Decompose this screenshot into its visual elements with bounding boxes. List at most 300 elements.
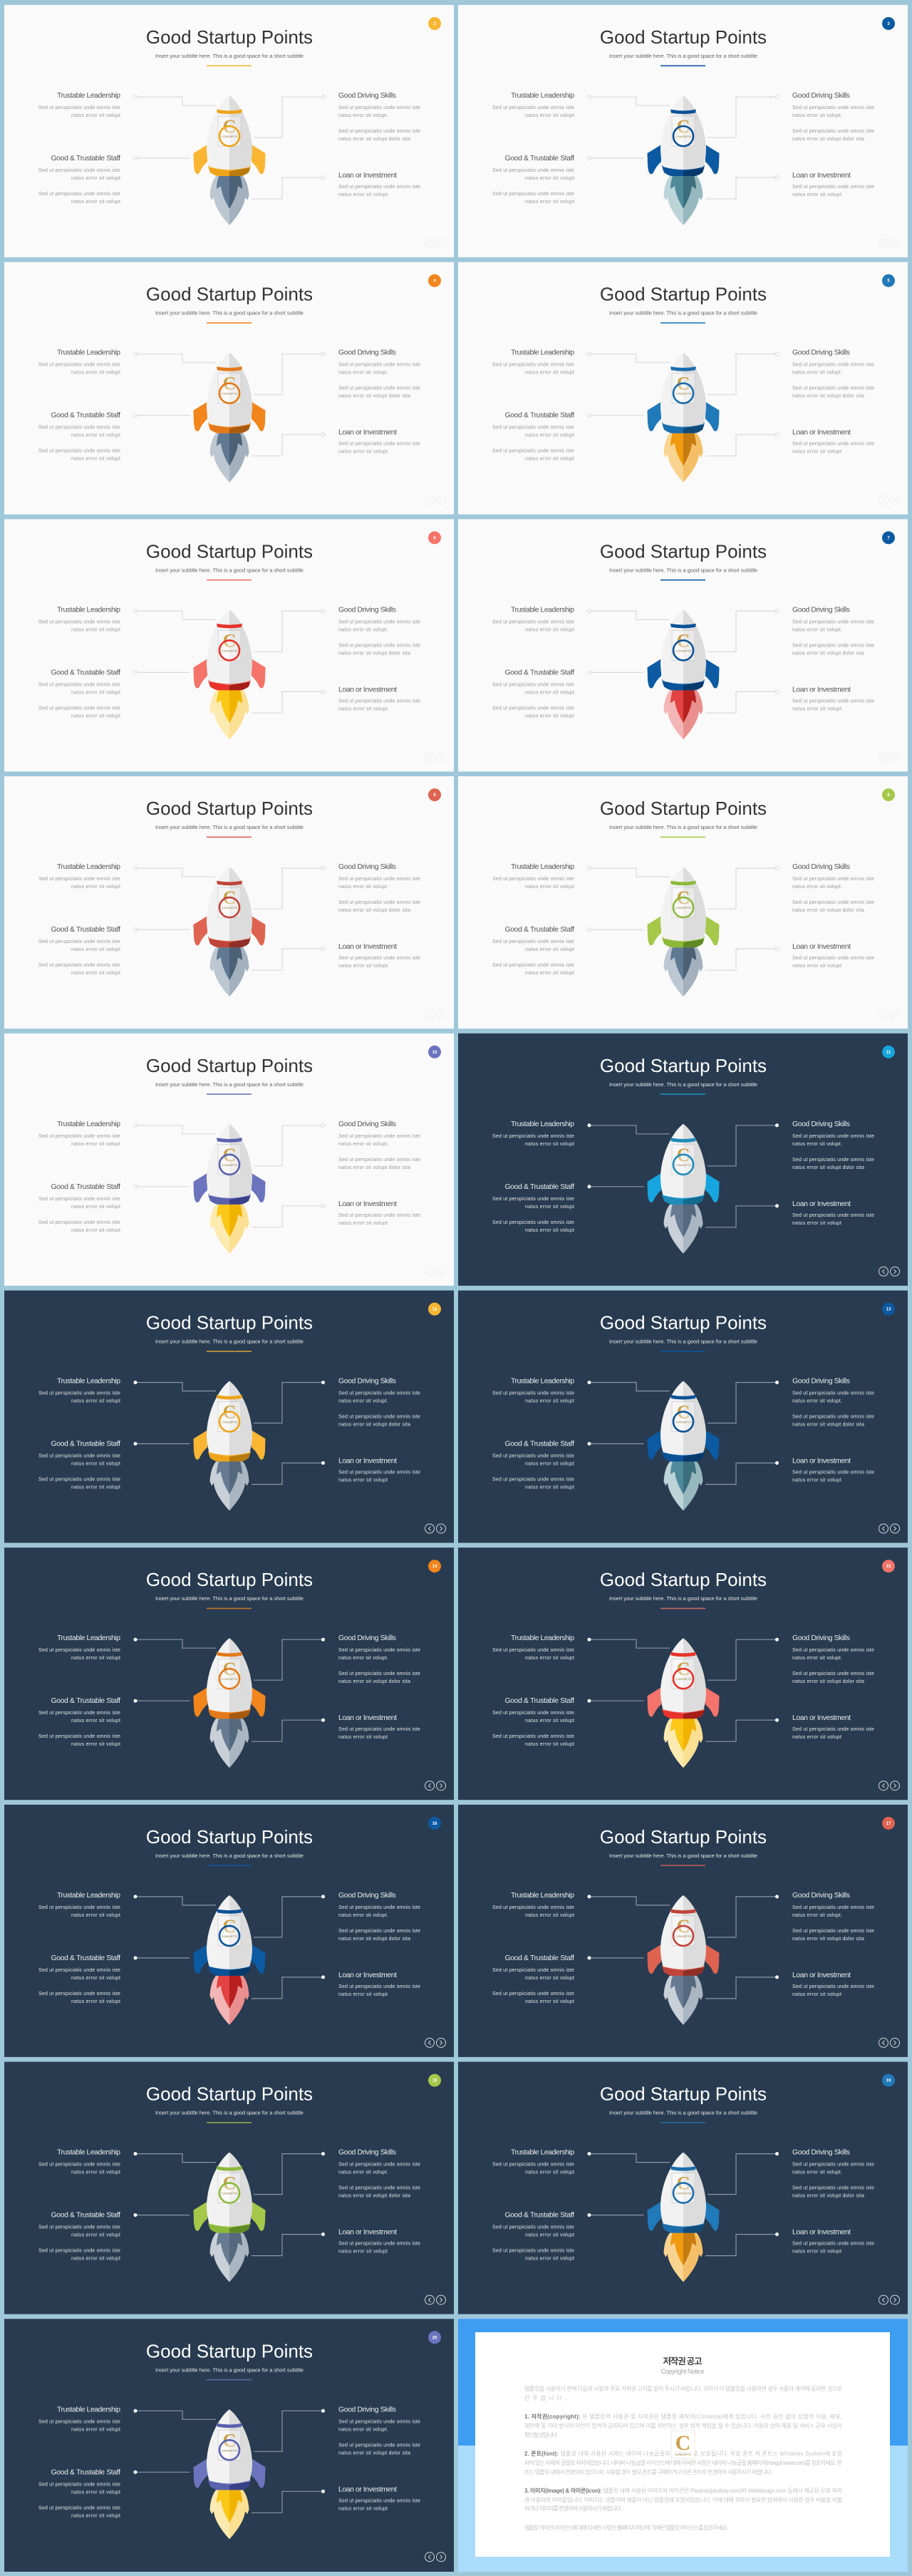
text block: left column: Trustable Leadership bbox=[57, 1120, 120, 1128]
subtitle: Insert your subtitle here. This is a good space for a short subtitle bbox=[155, 1595, 304, 1602]
text block: right column: natus error sit volupt. bbox=[792, 884, 842, 890]
title: Good Startup Points bbox=[146, 540, 313, 562]
title: Good Startup Points bbox=[600, 26, 767, 48]
text block: left column: Sed ut perspiciatis unde omnis iste bbox=[38, 681, 120, 687]
panel: slide 9 bbox=[458, 776, 908, 1029]
text block: right column bbox=[338, 2406, 420, 2511]
text block: left column: Good & Trustable Staff bbox=[51, 1697, 120, 1705]
nav arrows bbox=[425, 753, 446, 762]
text block: right column bbox=[792, 92, 874, 197]
text block: left column: Trustable Leadership bbox=[511, 92, 574, 100]
notice body text: 템플릿을 사용하기 전에 다음의 사항과 주요 저작권 고지를 읽어 주시기 바랍니다. 귀하가 이 템플릿을 사용하면 경우 사용자 계약에 동의한 것으로 bbox=[524, 2385, 842, 2392]
text block: left column: Good & Trustable Staff bbox=[51, 2212, 120, 2220]
accent underline bbox=[660, 1093, 705, 1095]
text block: left column: Sed ut perspiciatis unde omnis iste bbox=[492, 681, 574, 687]
icon: rocket bbox=[647, 2153, 720, 2282]
page badge bbox=[428, 17, 441, 30]
nav arrows bbox=[425, 238, 446, 248]
page badge: 8 bbox=[433, 793, 436, 798]
text block: right column: Sed ut perspiciatis unde omnis iste bbox=[792, 1671, 874, 1676]
text block: right column: Loan or Investment bbox=[338, 1200, 397, 1208]
text block: right column: Sed ut perspiciatis unde omnis iste bbox=[338, 441, 420, 447]
text block: right column: Sed ut perspiciatis unde omnis iste bbox=[338, 1414, 420, 1420]
panel: slide 17 bbox=[458, 1805, 908, 2057]
subtitle: Insert your subtitle here. This is a good space for a short subtitle bbox=[609, 1595, 757, 1602]
text block: right column: Good Driving Skills bbox=[792, 92, 850, 100]
text block: right column: Sed ut perspiciatis unde omnis iste bbox=[338, 2498, 420, 2503]
text block: right column: Sed ut perspiciatis unde omnis iste bbox=[338, 105, 420, 110]
text block: right column: natus error sit volupt dolor sita bbox=[338, 2193, 410, 2199]
text block: left column: natus error sit volupt bbox=[525, 1398, 574, 1404]
text block: left column: Good & Trustable Staff bbox=[504, 2212, 574, 2220]
text block: right column: Sed ut perspiciatis unde omnis iste bbox=[338, 1671, 420, 1676]
text block: left column: Sed ut perspiciatis unde omnis iste bbox=[38, 2248, 120, 2254]
page badge bbox=[882, 1303, 895, 1316]
icon: rocket bbox=[194, 96, 265, 225]
text block: left column: natus error sit volupt bbox=[525, 713, 574, 718]
text block: left column: Sed ut perspiciatis unde omnis iste bbox=[492, 1710, 574, 1716]
text block: left column bbox=[38, 349, 120, 462]
notice body text: 3. 이미지(image) & 아이콘(icon): 템플릿 내에 사용된 이미지와 아이콘은 Pixabay(pixabay.com)와 Webdesign.com 등에서 제공된 무료 저작 bbox=[524, 2487, 843, 2494]
page badge bbox=[428, 274, 441, 287]
text block: left column bbox=[38, 1377, 120, 1490]
icon: rocket: CONCEPTS bbox=[222, 1934, 237, 1938]
connectors bbox=[134, 1381, 325, 1484]
subtitle: Insert your subtitle here. This is a good space for a short subtitle bbox=[155, 1339, 304, 1344]
text block: left column: Good & Trustable Staff bbox=[504, 669, 574, 676]
text block: right column: natus error sit volupt bbox=[792, 963, 841, 969]
title: Good Startup Points bbox=[146, 1312, 313, 1333]
icon: rocket: CONCEPTS bbox=[675, 1163, 691, 1167]
text block: right column: natus error sit volupt bbox=[792, 1220, 841, 1226]
text block: right column bbox=[338, 2149, 420, 2255]
page badge bbox=[882, 1560, 895, 1572]
text block: left column: Sed ut perspiciatis unde omnis iste bbox=[492, 425, 574, 431]
accent underline bbox=[207, 1093, 252, 1095]
connectors bbox=[587, 867, 779, 970]
text block: left column: natus error sit volupt bbox=[525, 884, 574, 890]
text block: right column: Sed ut perspiciatis unde omnis iste bbox=[338, 184, 420, 190]
text block: left column: Sed ut perspiciatis unde omnis iste bbox=[492, 1477, 574, 1483]
text block: right column: Sed ut perspiciatis unde omnis iste bbox=[792, 1647, 874, 1653]
page badge bbox=[428, 2331, 441, 2344]
text block: left column bbox=[492, 92, 574, 205]
subtitle: Insert your subtitle here. This is a good space for a short subtitle bbox=[155, 53, 304, 59]
text block: right column: natus error sit volupt. bbox=[338, 1912, 388, 1918]
panel: slide 13 bbox=[458, 1290, 908, 1542]
notice heading: 저작권 공고 bbox=[663, 2356, 703, 2366]
panel: slide 7 bbox=[458, 519, 908, 771]
text block: right column: Sed ut perspiciatis unde omnis iste bbox=[792, 105, 874, 110]
logo watermark bbox=[671, 2431, 695, 2458]
text block: left column: Trustable Leadership bbox=[57, 2149, 120, 2157]
text block: right column: Sed ut perspiciatis unde omnis iste bbox=[792, 2185, 874, 2191]
page badge bbox=[882, 531, 895, 544]
subtitle: Insert your subtitle here. This is a good space for a short subtitle bbox=[155, 824, 304, 830]
text block: right column: natus error sit volupt. bbox=[792, 1141, 842, 1147]
text block: right column: natus error sit volupt bbox=[338, 963, 388, 969]
connectors bbox=[587, 1895, 779, 1999]
text block: left column: natus error sit volupt bbox=[71, 199, 120, 205]
page badge: 10 bbox=[432, 1051, 437, 1055]
text block: left column: Sed ut perspiciatis unde omnis iste bbox=[38, 1220, 120, 1225]
text block: left column: natus error sit volupt bbox=[525, 2170, 574, 2175]
text block: right column: Loan or Investment bbox=[338, 686, 397, 694]
page badge bbox=[882, 788, 895, 801]
text block: right column: natus error sit volupt dolor sita bbox=[792, 907, 864, 913]
text block: left column: Good & Trustable Staff bbox=[504, 926, 574, 934]
text block: left column: Sed ut perspiciatis unde omnis iste bbox=[38, 168, 120, 173]
text block: left column: Sed ut perspiciatis unde omnis iste bbox=[38, 1905, 120, 1910]
text block: left column: Sed ut perspiciatis unde omnis iste bbox=[492, 1647, 574, 1653]
text block: left column: Trustable Leadership bbox=[511, 1634, 574, 1642]
text block: right column: Sed ut perspiciatis unde omnis iste bbox=[338, 619, 420, 624]
text block: left column: Trustable Leadership bbox=[511, 606, 574, 614]
text block: left column: natus error sit volupt bbox=[71, 1975, 120, 1981]
text block: left column bbox=[492, 2149, 574, 2262]
icon: rocket: CONCEPTS bbox=[675, 1420, 691, 1424]
text block: left column: Trustable Leadership bbox=[57, 2406, 120, 2413]
nav arrows bbox=[425, 2552, 446, 2562]
text block: left column: Sed ut perspiciatis unde omnis iste bbox=[492, 1390, 574, 1396]
text block: left column: natus error sit volupt bbox=[71, 1461, 120, 1467]
page badge: 4 bbox=[433, 279, 436, 284]
accent underline bbox=[660, 1608, 705, 1609]
icon: rocket: C bbox=[677, 1916, 690, 1937]
text block: left column: Sed ut perspiciatis unde omnis iste bbox=[492, 2162, 574, 2168]
text block: right column: natus error sit volupt. bbox=[792, 1912, 842, 1918]
icon: rocket bbox=[647, 1124, 720, 1254]
title: Good Startup Points bbox=[600, 1055, 767, 1076]
title: Good Startup Points bbox=[600, 2083, 767, 2105]
text block: left column: natus error sit volupt bbox=[525, 1655, 574, 1661]
text block: right column bbox=[338, 1892, 420, 1997]
title: Good Startup Points bbox=[146, 1055, 313, 1076]
icon: rocket: C bbox=[677, 887, 690, 908]
text block: left column: Trustable Leadership bbox=[511, 349, 574, 357]
nav arrows bbox=[425, 1524, 446, 1533]
icon: rocket: CONCEPTS bbox=[675, 135, 691, 138]
accent underline bbox=[207, 579, 252, 580]
panel: slide 19 bbox=[458, 2062, 908, 2314]
text block: right column: natus error sit volupt bbox=[792, 1477, 841, 1483]
title: Good Startup Points bbox=[600, 540, 767, 562]
text block: left column: Sed ut perspiciatis unde omnis iste bbox=[38, 105, 120, 110]
text block: right column: natus error sit volupt dolor sita bbox=[338, 393, 410, 399]
text block: left column: Good & Trustable Staff bbox=[51, 669, 120, 676]
text block: right column: natus error sit volupt bbox=[792, 449, 841, 455]
text block: left column: natus error sit volupt bbox=[525, 456, 574, 462]
subtitle: Insert your subtitle here. This is a good space for a short subtitle bbox=[155, 2366, 304, 2373]
text block: left column bbox=[492, 349, 574, 462]
page badge: 12 bbox=[432, 1307, 437, 1312]
text block: left column bbox=[492, 1634, 574, 1747]
text block: right column: Good Driving Skills bbox=[792, 1120, 850, 1128]
icon: rocket bbox=[194, 1124, 265, 1254]
text block: left column: natus error sit volupt bbox=[71, 2232, 120, 2238]
accent underline bbox=[660, 837, 705, 838]
panel: slide 4 bbox=[4, 262, 454, 515]
page badge bbox=[428, 788, 441, 801]
text block: right column: natus error sit volupt bbox=[792, 706, 841, 711]
text block: right column: Sed ut perspiciatis unde omnis iste bbox=[792, 2162, 874, 2168]
text block: right column: Sed ut perspiciatis unde omnis iste bbox=[338, 900, 420, 905]
text block: right column: Good Driving Skills bbox=[792, 1377, 850, 1386]
nav arrows bbox=[879, 238, 899, 248]
text block: right column: Sed ut perspiciatis unde omnis iste bbox=[792, 1414, 874, 1420]
text block: left column: Sed ut perspiciatis unde omnis iste bbox=[492, 705, 574, 711]
text block: left column: Sed ut perspiciatis unde omnis iste bbox=[38, 1991, 120, 1997]
accent underline bbox=[207, 1608, 252, 1609]
page badge bbox=[428, 1817, 441, 1830]
title: Good Startup Points bbox=[146, 284, 313, 305]
text block: left column bbox=[492, 1377, 574, 1490]
icon: rocket: CONCEPTS bbox=[675, 1934, 691, 1938]
icon: rocket: CONCEPTS bbox=[222, 1420, 237, 1424]
text block: left column: Sed ut perspiciatis unde omnis iste bbox=[38, 1453, 120, 1458]
white notice card bbox=[475, 2332, 890, 2557]
text block: right column: Loan or Investment bbox=[338, 2229, 397, 2237]
text block: left column: Sed ut perspiciatis unde omnis iste bbox=[38, 1133, 120, 1139]
nav arrows bbox=[879, 1524, 899, 1533]
text block: right column: natus error sit volupt dolor sita bbox=[338, 136, 410, 142]
text block: right column: natus error sit volupt bbox=[338, 2505, 388, 2511]
icon: rocket bbox=[194, 2153, 265, 2282]
text block: left column: natus error sit volupt bbox=[71, 433, 120, 438]
text block: left column: Sed ut perspiciatis unde omnis iste bbox=[492, 962, 574, 968]
page badge bbox=[428, 2074, 441, 2087]
text block: left column: natus error sit volupt bbox=[71, 1741, 120, 1747]
connectors bbox=[134, 1123, 325, 1227]
text block: left column: Sed ut perspiciatis unde omnis iste bbox=[38, 1390, 120, 1396]
text block: right column: natus error sit volupt. bbox=[792, 1655, 842, 1661]
text block: left column: natus error sit volupt bbox=[71, 947, 120, 952]
text block: right column: Sed ut perspiciatis unde omnis iste bbox=[792, 642, 874, 648]
text block: left column bbox=[38, 1120, 120, 1233]
title: Good Startup Points bbox=[146, 26, 313, 48]
text block: left column: Sed ut perspiciatis unde omnis iste bbox=[492, 1967, 574, 1973]
panel: slide 6 bbox=[4, 519, 454, 771]
text block: left column: Sed ut perspiciatis unde omnis iste bbox=[38, 2225, 120, 2230]
text block: right column: Sed ut perspiciatis unde omnis iste bbox=[338, 2442, 420, 2448]
text block: right column: Good Driving Skills bbox=[792, 2149, 850, 2157]
text block: left column bbox=[38, 606, 120, 718]
nav arrows bbox=[425, 2295, 446, 2304]
icon: rocket bbox=[194, 2409, 265, 2539]
text block: right column: Sed ut perspiciatis unde omnis iste bbox=[338, 362, 420, 368]
notice body text: 트는 템플릿 내에서 변경되지 않으므로, 사용할 경우 필요 폰트를 구매하거나 다른 폰트로 변경하여 사용하시기 바랍니다. bbox=[524, 2468, 772, 2475]
text block: left column: natus error sit volupt bbox=[525, 689, 574, 695]
text block: left column: Good & Trustable Staff bbox=[51, 412, 120, 420]
text block: right column: Sed ut perspiciatis unde omnis iste bbox=[792, 1470, 874, 1475]
text block: left column: natus error sit volupt bbox=[71, 1227, 120, 1233]
text block: right column: Sed ut perspiciatis unde omnis iste bbox=[792, 386, 874, 391]
text block: right column: Loan or Investment bbox=[792, 686, 851, 694]
notice body text: 템플릿 저작권 라이선스에 대해 자세한 사항은 홈페이지 하단에 기재된 템플릿 라이선스를 참조하세요. bbox=[524, 2524, 728, 2531]
text block: right column: Sed ut perspiciatis unde omnis iste bbox=[792, 1726, 874, 1732]
panel: slide 11 bbox=[458, 1034, 908, 1286]
text block: right column bbox=[792, 863, 874, 969]
icon: rocket bbox=[647, 867, 720, 996]
icon: rocket: C bbox=[223, 1659, 236, 1679]
icon: rocket: C bbox=[223, 373, 236, 394]
text block: right column: Sed ut perspiciatis unde omnis iste bbox=[792, 1928, 874, 1934]
text block: left column: Trustable Leadership bbox=[511, 1377, 574, 1386]
text block: right column: Good Driving Skills bbox=[338, 92, 396, 100]
text block: left column: Sed ut perspiciatis unde omnis iste bbox=[38, 1477, 120, 1483]
icon: rocket: CONCEPTS bbox=[222, 135, 237, 138]
text block: left column: Good & Trustable Staff bbox=[51, 926, 120, 934]
text block: left column: Sed ut perspiciatis unde omnis iste bbox=[38, 1710, 120, 1716]
text block: right column: natus error sit volupt bbox=[338, 706, 388, 711]
text block: right column: natus error sit volupt bbox=[338, 1477, 388, 1483]
text block: left column: Good & Trustable Staff bbox=[504, 1697, 574, 1705]
icon: rocket: C bbox=[677, 630, 690, 651]
text block: left column: natus error sit volupt bbox=[525, 370, 574, 376]
connectors bbox=[587, 96, 779, 199]
text block: right column: Good Driving Skills bbox=[792, 1892, 850, 1900]
text block: right column: natus error sit volupt dolor sita bbox=[338, 1421, 410, 1427]
logo watermark: C bbox=[675, 2431, 690, 2455]
text block: right column: Loan or Investment bbox=[792, 2229, 851, 2237]
page badge: 20 bbox=[432, 2336, 437, 2340]
text block: left column: natus error sit volupt bbox=[525, 1975, 574, 1981]
subtitle: Insert your subtitle here. This is a good space for a short subtitle bbox=[155, 2110, 304, 2116]
title: Good Startup Points bbox=[600, 284, 767, 305]
text block: right column: Loan or Investment bbox=[792, 1714, 851, 1722]
text block: right column: Sed ut perspiciatis unde omnis iste bbox=[792, 441, 874, 447]
text block: left column bbox=[492, 606, 574, 718]
connectors bbox=[134, 609, 325, 713]
text block: left column: Trustable Leadership bbox=[57, 1634, 120, 1642]
text block: left column: natus error sit volupt bbox=[71, 2489, 120, 2495]
notice body text: 1. 저작권(copyright): 본 템플릿의 사용권 및 저작권은 템플릿 제작자(Contents)에게 있습니다. 사전 승인 없이 상업적 이용, 배포, bbox=[524, 2413, 842, 2420]
panel: slide 10 bbox=[4, 1034, 454, 1286]
text block: left column: Good & Trustable Staff bbox=[504, 1440, 574, 1448]
text block: left column: Sed ut perspiciatis unde omnis iste bbox=[38, 705, 120, 711]
panel: slide 18 bbox=[4, 2062, 454, 2314]
text block: right column bbox=[338, 349, 420, 455]
nav arrows bbox=[425, 495, 446, 505]
title: Good Startup Points bbox=[146, 798, 313, 819]
text block: left column: Trustable Leadership bbox=[511, 1120, 574, 1128]
icon: rocket bbox=[194, 867, 265, 996]
nav arrows bbox=[879, 1010, 899, 1019]
text block: right column bbox=[792, 349, 874, 455]
text block: left column: Sed ut perspiciatis unde omnis iste bbox=[492, 105, 574, 110]
accent underline bbox=[660, 1865, 705, 1866]
text block: right column: Sed ut perspiciatis unde omnis iste bbox=[338, 386, 420, 391]
text block: left column: Sed ut perspiciatis unde omnis iste bbox=[492, 362, 574, 368]
text block: left column: Sed ut perspiciatis unde omnis iste bbox=[38, 1967, 120, 1973]
text block: right column: Sed ut perspiciatis unde omnis iste bbox=[792, 1905, 874, 1910]
text block: right column: Sed ut perspiciatis unde omnis iste bbox=[338, 2185, 420, 2191]
subtitle: Insert your subtitle here. This is a good space for a short subtitle bbox=[609, 1081, 757, 1088]
text block: left column bbox=[38, 92, 120, 205]
text block: left column: natus error sit volupt bbox=[525, 1484, 574, 1490]
page badge bbox=[428, 1046, 441, 1058]
nav arrows bbox=[879, 1267, 899, 1276]
text block: left column: natus error sit volupt bbox=[71, 1655, 120, 1661]
text block: right column: Good Driving Skills bbox=[338, 863, 396, 871]
text block: left column bbox=[38, 863, 120, 976]
subtitle: Insert your subtitle here. This is a good space for a short subtitle bbox=[609, 53, 757, 59]
text block: left column: Sed ut perspiciatis unde omnis iste bbox=[38, 2481, 120, 2487]
icon: rocket bbox=[647, 1638, 720, 1768]
icon: rocket: C bbox=[677, 1659, 690, 1679]
text block: right column: Sed ut perspiciatis unde omnis iste bbox=[792, 1133, 874, 1139]
text block: left column: Good & Trustable Staff bbox=[504, 412, 574, 420]
connectors bbox=[134, 96, 325, 199]
text block: right column: Loan or Investment bbox=[338, 943, 397, 951]
text block: right column: Good Driving Skills bbox=[338, 349, 396, 357]
connectors bbox=[587, 1123, 779, 1227]
text block: right column: Sed ut perspiciatis unde omnis iste bbox=[792, 955, 874, 961]
text block: right column: natus error sit volupt bbox=[792, 192, 841, 197]
text block: right column: natus error sit volupt dolor sita bbox=[338, 907, 410, 913]
page badge: 18 bbox=[432, 2079, 437, 2083]
text block: right column: natus error sit volupt. bbox=[338, 370, 388, 376]
text block: left column: Good & Trustable Staff bbox=[51, 1183, 120, 1191]
icon: rocket: CONCEPTS bbox=[222, 2448, 237, 2452]
text block: right column: natus error sit volupt dolor sita bbox=[338, 1165, 410, 1170]
page badge: 5 bbox=[887, 279, 890, 284]
text block: right column: natus error sit volupt dolor sita bbox=[792, 1421, 864, 1427]
title: Good Startup Points bbox=[146, 2083, 313, 2105]
text block: right column: natus error sit volupt. bbox=[338, 884, 388, 890]
text block: left column: Sed ut perspiciatis unde omnis iste bbox=[38, 448, 120, 454]
panel: slide 2 bbox=[4, 5, 454, 257]
accent underline bbox=[660, 579, 705, 580]
page badge: 7 bbox=[887, 536, 890, 540]
text block: left column: Sed ut perspiciatis unde omnis iste bbox=[38, 939, 120, 944]
text block: right column: Sed ut perspiciatis unde omnis iste bbox=[338, 1726, 420, 1732]
text block: right column: Loan or Investment bbox=[792, 172, 851, 180]
nav arrows bbox=[425, 1267, 446, 1276]
text block: left column: natus error sit volupt bbox=[71, 1204, 120, 1210]
text block: right column: natus error sit volupt. bbox=[792, 113, 842, 118]
accent underline bbox=[660, 322, 705, 324]
icon: rocket: C bbox=[677, 1401, 690, 1423]
subtitle: Insert your subtitle here. This is a good space for a short subtitle bbox=[609, 1853, 757, 1859]
notice body text: 확인될 것입니다. bbox=[524, 2431, 558, 2438]
text block: right column: Loan or Investment bbox=[338, 1972, 397, 1979]
text block: right column bbox=[792, 1892, 874, 1997]
nav arrows bbox=[879, 1781, 899, 1791]
page badge: 2 bbox=[433, 22, 436, 26]
text block: right column: Sed ut perspiciatis unde omnis iste bbox=[338, 642, 420, 648]
text block: left column: Sed ut perspiciatis unde omnis iste bbox=[38, 362, 120, 368]
text block: right column: Loan or Investment bbox=[792, 1457, 851, 1465]
text block: left column: natus error sit volupt bbox=[71, 970, 120, 976]
text block: left column: Trustable Leadership bbox=[511, 1892, 574, 1900]
text block: left column: natus error sit volupt bbox=[71, 1999, 120, 2004]
connectors bbox=[134, 1638, 325, 1741]
text block: right column: Loan or Investment bbox=[338, 2485, 397, 2493]
nav arrows bbox=[879, 753, 899, 762]
text block: right column: natus error sit volupt dolor sita bbox=[792, 2193, 864, 2199]
icon: rocket bbox=[194, 1381, 265, 1511]
text block: right column: natus error sit volupt bbox=[338, 2249, 388, 2255]
text block: right column: natus error sit volupt. bbox=[792, 370, 842, 376]
icon: rocket: C bbox=[677, 116, 690, 137]
text block: right column: Loan or Investment bbox=[792, 1200, 851, 1208]
icon: rocket: CONCEPTS bbox=[222, 1163, 237, 1167]
text block: right column: Sed ut perspiciatis unde omnis iste bbox=[338, 1928, 420, 1934]
text block: right column bbox=[792, 1634, 874, 1740]
text block: right column: natus error sit volupt bbox=[338, 1220, 388, 1226]
icon: rocket: C bbox=[677, 373, 690, 394]
